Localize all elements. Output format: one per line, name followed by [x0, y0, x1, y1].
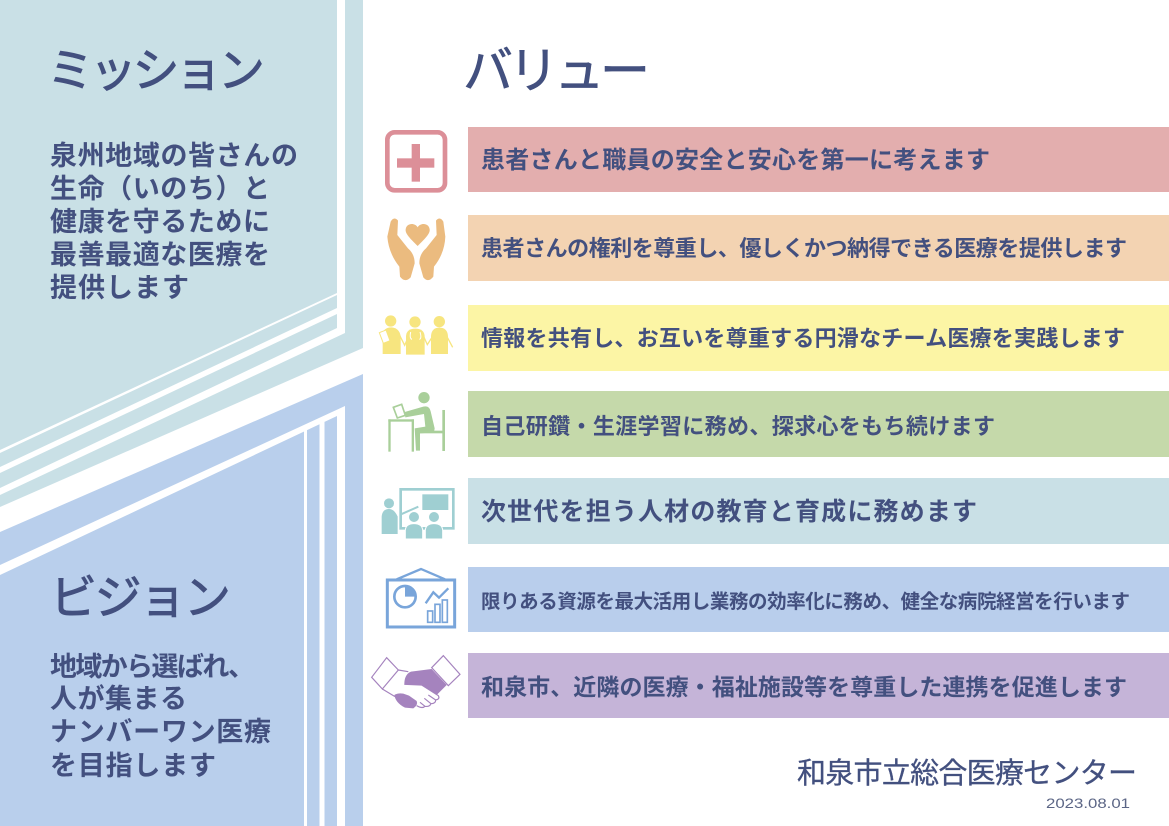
icon: hands holding heart: [387, 219, 445, 280]
date: 2023.08.01: [1046, 795, 1130, 811]
panel: vision background: [0, 374, 363, 826]
text block: mission statement: [50, 141, 298, 303]
text block: vision statement: 地域から選ばれ、: [50, 652, 255, 682]
value bar 5: education: [468, 478, 1169, 544]
value bar 1: safety: 患者さんと職員の安全と安心を第一に考えます: [481, 147, 990, 174]
value bar 4: lifelong learning: 自己研鑽・生涯学習に務め、探求心をもち続けます: [481, 414, 995, 439]
text block: mission statement: 提供します: [50, 273, 189, 303]
value bar 2: patient rights: 患者さんの権利を尊重し、優しくかつ納得できる医療を提供します: [481, 236, 1127, 261]
value bar 6: efficient management: [468, 567, 1169, 632]
text block: mission statement: 健康を守るために: [50, 207, 270, 237]
value bar 1: safety: [468, 127, 1169, 192]
value bar 3: teamwork: 情報を共有し、お互いを尊重する円滑なチーム医療を実践します: [481, 326, 1125, 351]
icon: handshake: [372, 656, 460, 708]
value bar 3: teamwork: [468, 305, 1169, 371]
icon: medical cross: [387, 132, 445, 190]
value bar 2: patient rights: [468, 215, 1169, 281]
icon: board with charts: [387, 569, 455, 627]
value bar 5: education: 次世代を担う人材の教育と育成に務めます: [481, 498, 977, 526]
text block: vision statement: を目指します: [50, 751, 216, 781]
text block: vision statement: ナンバーワン医療: [50, 717, 271, 747]
text block: mission statement: 泉州地域の皆さんの: [50, 141, 298, 171]
value bar 7: regional cooperation: 和泉市、近隣の医療・福祉施設等を尊重した連携を促進します: [481, 674, 1127, 700]
panel: mission background: [0, 0, 363, 507]
text block: vision statement: 人が集まる: [50, 683, 187, 714]
value bar 7: regional cooperation: [468, 653, 1169, 718]
icon: medical team: [379, 315, 453, 355]
heading: value: バリュー: [463, 43, 650, 99]
hospital name: 和泉市立総合医療センター: [797, 757, 1137, 790]
text block: mission statement: 生命（いのち）と: [50, 174, 270, 204]
heading: mission: ミッション: [47, 44, 265, 97]
icon: teacher and students: [382, 489, 453, 539]
value bar 6: efficient management: 限りある資源を最大活用し業務の効率化に務め、健全な病院経営を行います: [481, 591, 1130, 613]
heading: vision: ビジョン: [50, 571, 231, 624]
value bar 4: lifelong learning: [468, 391, 1169, 457]
icon: person studying at desk: [388, 392, 445, 452]
text block: mission statement: 最善最適な医療を: [50, 240, 270, 270]
text block: vision statement: [50, 652, 271, 781]
